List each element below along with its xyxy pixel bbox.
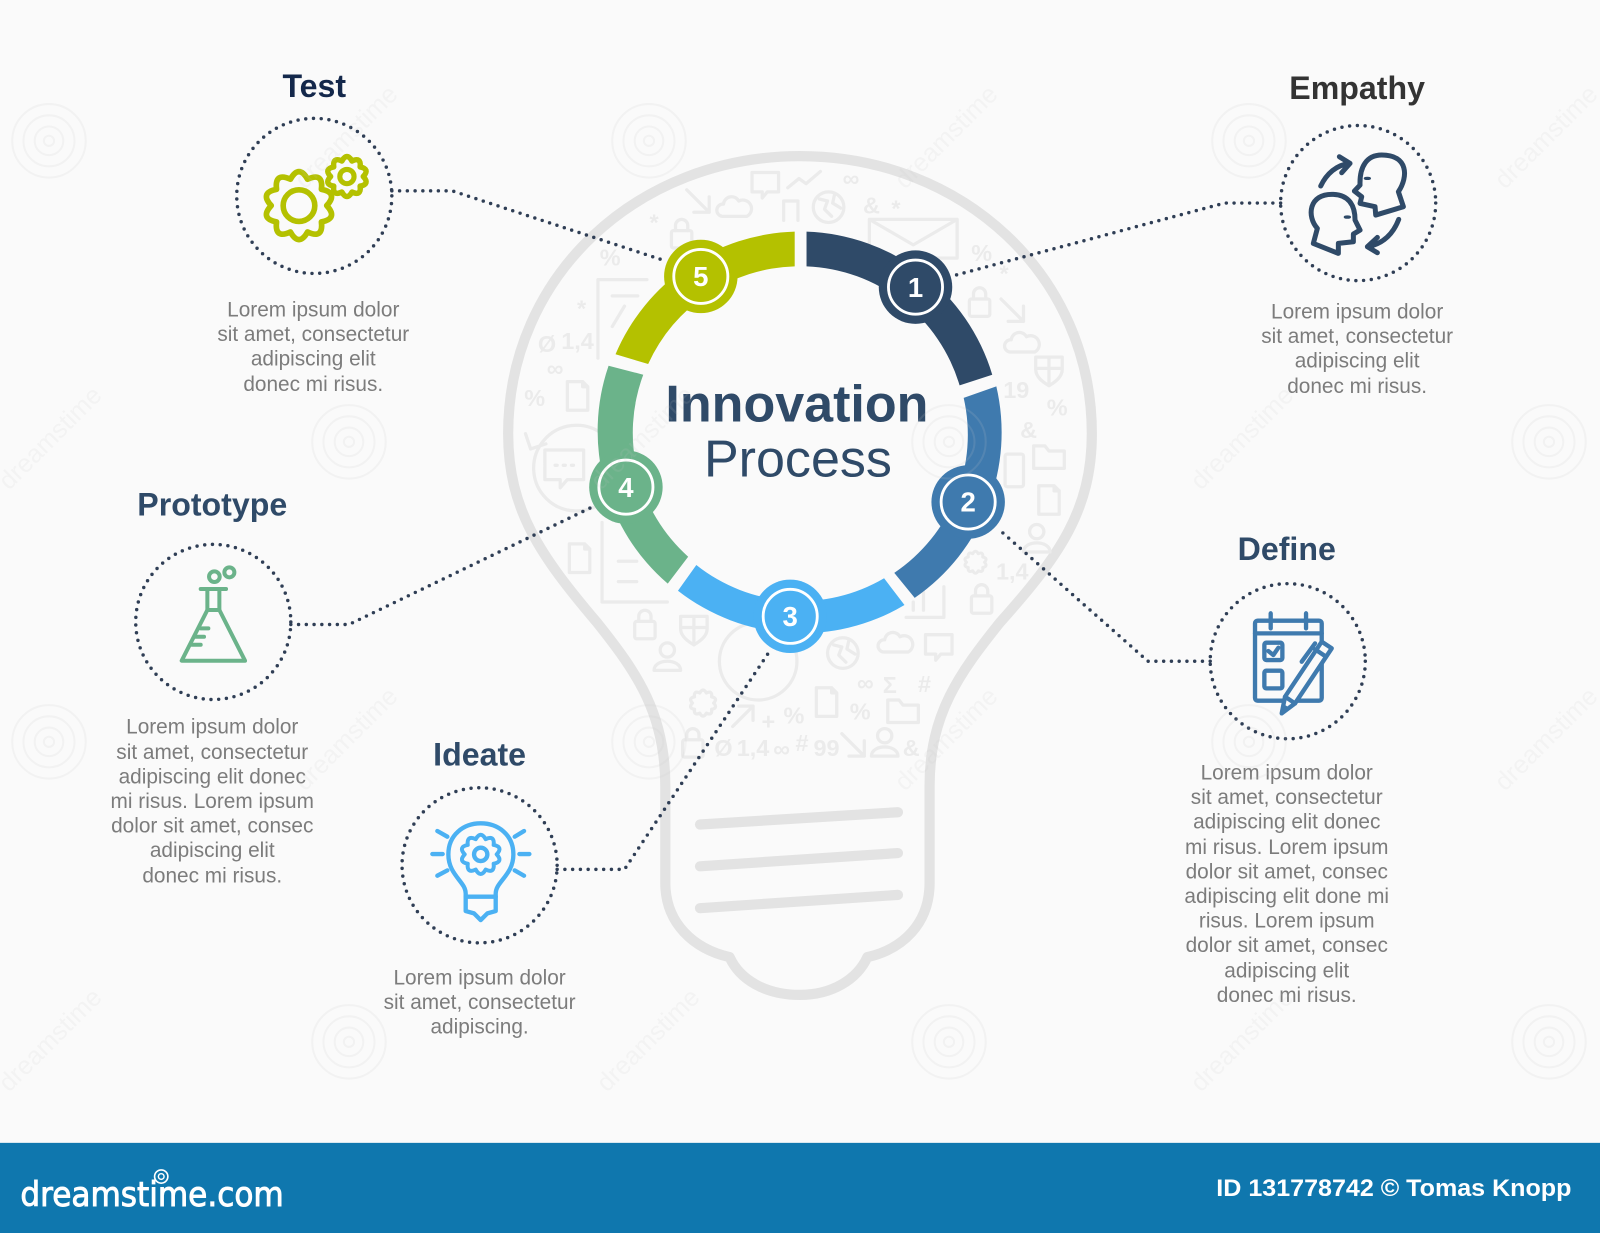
node 4 bbox=[589, 450, 663, 524]
text: prototype: Lorem ipsum dolor bbox=[126, 716, 298, 739]
text: define: Lorem ipsum dolor bbox=[1201, 762, 1373, 785]
text: ideate: adipiscing. bbox=[430, 1016, 529, 1039]
node 5: 5 bbox=[693, 261, 708, 292]
heading: ideate: Ideate bbox=[433, 736, 526, 772]
watermark overlay: dreamstime bbox=[889, 80, 1003, 194]
icon: gears bbox=[266, 157, 366, 240]
text: empathy: donec mi risus. bbox=[1287, 375, 1427, 398]
faint background doodle icons inside bulb: # bbox=[918, 671, 931, 697]
node 2 bbox=[931, 465, 1005, 539]
ring segment 2 bbox=[894, 386, 1002, 598]
text: test: donec mi risus. bbox=[243, 373, 383, 396]
icon: flask bbox=[182, 567, 245, 661]
faint background doodle icons inside bulb: & bbox=[1020, 417, 1037, 443]
faint background doodle icons inside bulb: 1,4 bbox=[737, 735, 769, 761]
text: ideate: Lorem ipsum dolor bbox=[393, 967, 566, 990]
faint background doodle icons inside bulb: * bbox=[650, 210, 660, 236]
icon: light bulb with gear bbox=[432, 823, 529, 920]
faint background doodle icons inside bulb: * bbox=[577, 295, 587, 321]
ring segment 5 bbox=[616, 232, 795, 364]
text: empathy: adipiscing elit bbox=[1295, 349, 1420, 372]
panel: empathy bbox=[1261, 70, 1453, 398]
process ring bbox=[589, 232, 1005, 653]
faint background doodle icons inside bulb: % bbox=[600, 244, 621, 270]
faint background doodle icons inside bulb: + bbox=[762, 709, 775, 735]
center title: Innovation bbox=[665, 375, 928, 433]
text: define: sit amet, consectetur bbox=[1191, 786, 1383, 809]
faint background doodle icons inside bulb: % bbox=[783, 702, 804, 728]
heading: empathy: Empathy bbox=[1289, 70, 1425, 106]
heading: test: Test bbox=[282, 68, 346, 104]
text: prototype: dolor sit amet, consec bbox=[111, 815, 313, 838]
ring segment 1 bbox=[807, 232, 992, 385]
faint background doodle icons inside bulb: 19 bbox=[1003, 377, 1029, 403]
watermark overlay: dreamstime bbox=[585, 381, 699, 495]
icon: calendar checklist and pencil bbox=[1255, 613, 1332, 713]
panel: test bbox=[217, 68, 409, 396]
footer bar bbox=[0, 1143, 1600, 1233]
faint background doodle icons inside bulb: % bbox=[1047, 394, 1068, 420]
faint background doodle icons inside bulb: # bbox=[796, 730, 809, 756]
footer logo: dreamstime.com bbox=[20, 1175, 284, 1214]
watermark overlay: dreamstime bbox=[1185, 983, 1299, 1097]
watermark overlay: dreamstime bbox=[889, 682, 1003, 796]
watermark overlay: dreamstime bbox=[289, 682, 403, 796]
ring segment 4 bbox=[598, 366, 688, 584]
node 1: 1 bbox=[908, 272, 923, 303]
text: prototype bbox=[111, 716, 314, 888]
text: ideate: sit amet, consectetur bbox=[384, 991, 576, 1014]
faint background doodle icons inside bulb: 99 bbox=[813, 735, 840, 761]
panel: ideate bbox=[384, 736, 576, 1039]
watermark overlay: dreamstime bbox=[289, 80, 403, 194]
text: prototype: adipiscing elit bbox=[150, 839, 275, 862]
faint background doodle icons inside bulb: % bbox=[971, 240, 992, 266]
faint background doodle icons inside bulb: ∞ bbox=[547, 356, 563, 382]
text: prototype: donec mi risus. bbox=[142, 865, 282, 888]
faint background doodle icons inside bulb: * bbox=[891, 195, 901, 221]
text: test: sit amet, consectetur bbox=[217, 323, 409, 346]
faint background doodle icons inside bulb: % bbox=[524, 385, 545, 411]
center title bbox=[665, 375, 928, 489]
faint background doodle icons inside bulb: % bbox=[850, 698, 871, 724]
text: define: donec mi risus. bbox=[1217, 984, 1357, 1007]
watermark overlay: dreamstime bbox=[591, 983, 705, 1097]
connector: prototype bbox=[291, 507, 592, 624]
faint background doodle icons inside bulb: ∞ bbox=[857, 670, 874, 696]
text: define: dolor sit amet, consec bbox=[1186, 861, 1388, 884]
text: prototype: adipiscing elit donec bbox=[119, 766, 306, 789]
text: test bbox=[217, 298, 409, 396]
center title: Process bbox=[704, 431, 892, 489]
dotted circle: empathy bbox=[1281, 126, 1436, 281]
node 4: 4 bbox=[618, 472, 634, 503]
dotted circle: test bbox=[237, 118, 392, 273]
faint background doodle icons inside bulb: & bbox=[863, 192, 880, 218]
light bulb outline bbox=[508, 156, 1092, 995]
watermark overlay: dreamstime bbox=[1185, 381, 1299, 495]
faint background doodle icons inside bulb: Σ bbox=[883, 672, 897, 698]
text: define: risus. Lorem ipsum bbox=[1199, 910, 1375, 933]
faint background doodle icons inside bulb: ∞ bbox=[843, 166, 859, 192]
text: empathy bbox=[1261, 300, 1453, 398]
panel: define bbox=[1184, 531, 1389, 1007]
connector: ideate bbox=[557, 650, 770, 869]
node 1 bbox=[879, 250, 952, 324]
text: ideate bbox=[384, 967, 576, 1039]
connector: empathy bbox=[954, 203, 1281, 276]
text: define: adipiscing elit donec bbox=[1193, 811, 1380, 834]
faint background doodle icons inside bulb bbox=[524, 166, 1068, 762]
faint background doodle icons inside bulb: * bbox=[1000, 261, 1010, 287]
text: define bbox=[1184, 762, 1389, 1007]
panel: prototype bbox=[111, 486, 314, 888]
watermark overlay: dreamstime bbox=[1489, 682, 1600, 796]
heading: prototype: Prototype bbox=[137, 486, 287, 522]
faint background doodle icons inside bulb: 1,4 bbox=[561, 328, 594, 354]
footer credit: ID 131778742 © Tomas Knopp bbox=[1216, 1175, 1571, 1202]
watermark overlay: dreamstime bbox=[1489, 80, 1600, 194]
connector: test bbox=[392, 191, 663, 260]
node 5 bbox=[664, 240, 738, 313]
text: empathy: sit amet, consectetur bbox=[1261, 325, 1453, 348]
dotted circle: define bbox=[1210, 584, 1365, 739]
faint background doodle icons inside bulb: & bbox=[903, 735, 920, 761]
text: empathy: Lorem ipsum dolor bbox=[1271, 300, 1443, 323]
dotted circle: prototype bbox=[136, 544, 291, 699]
node 3: 3 bbox=[783, 601, 798, 632]
node 3 bbox=[753, 580, 827, 653]
text: define: adipiscing elit done mi bbox=[1184, 885, 1389, 908]
faint background doodle icons inside bulb: Ø bbox=[714, 735, 733, 761]
node 2: 2 bbox=[960, 487, 976, 518]
text: test: Lorem ipsum dolor bbox=[227, 298, 399, 321]
text: prototype: sit amet, consectetur bbox=[116, 741, 308, 764]
icon: two heads with arrows bbox=[1311, 155, 1405, 253]
text: define: dolor sit amet, consec bbox=[1186, 934, 1388, 957]
connector: define bbox=[998, 529, 1210, 661]
heading: define: Define bbox=[1238, 531, 1336, 567]
faint background doodle icons inside bulb: Ø bbox=[538, 331, 556, 357]
dotted circle: ideate bbox=[402, 788, 557, 943]
text: test: adipiscing elit bbox=[251, 347, 376, 370]
faint background doodle icons inside bulb: 1,4 bbox=[996, 559, 1029, 585]
faint background doodle icons inside bulb: ∞ bbox=[773, 736, 790, 762]
text: prototype: mi risus. Lorem ipsum bbox=[111, 790, 314, 813]
ring segment 3 bbox=[678, 565, 904, 633]
text: define: adipiscing elit bbox=[1224, 960, 1349, 983]
text: define: mi risus. Lorem ipsum bbox=[1185, 836, 1388, 859]
